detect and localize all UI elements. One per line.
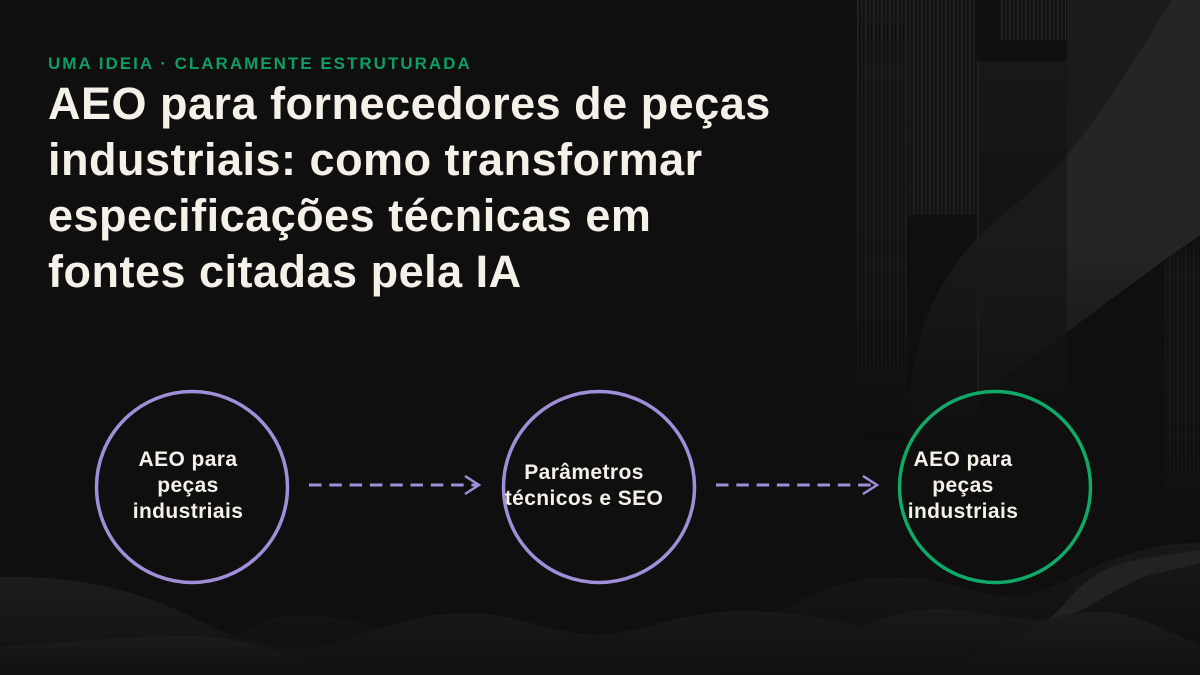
circle 1 label: AEO para	[139, 448, 237, 471]
title: fontes citadas pela IA	[48, 246, 522, 297]
title: AEO para fornecedores de peças	[48, 78, 771, 129]
title: especificações técnicas em	[48, 190, 651, 241]
circle 2 label	[505, 461, 663, 510]
ribbon band	[940, 0, 1200, 332]
title	[48, 78, 771, 297]
circle 3 label: AEO para	[914, 448, 1012, 471]
circle 2 label: Parâmetros	[524, 461, 644, 484]
circle 3 label: peças	[932, 474, 994, 497]
eyebrow: UMA IDEIA · CLARAMENTE ESTRUTURADA	[48, 54, 472, 73]
circle 1 label: peças	[157, 474, 219, 497]
circle 1 label	[133, 448, 243, 523]
title: industriais: como transformar	[48, 134, 703, 185]
arrow 2	[716, 475, 880, 495]
circle 2 label: técnicos e SEO	[505, 487, 663, 510]
dunes	[0, 543, 1200, 675]
circle 3 label: industriais	[908, 500, 1018, 523]
circle 1 label: industriais	[133, 500, 243, 523]
circle 2	[502, 390, 696, 584]
arrow 1	[309, 475, 482, 495]
circle 1	[94, 390, 290, 584]
circle 3 label	[908, 448, 1018, 523]
circle 3	[898, 390, 1092, 584]
